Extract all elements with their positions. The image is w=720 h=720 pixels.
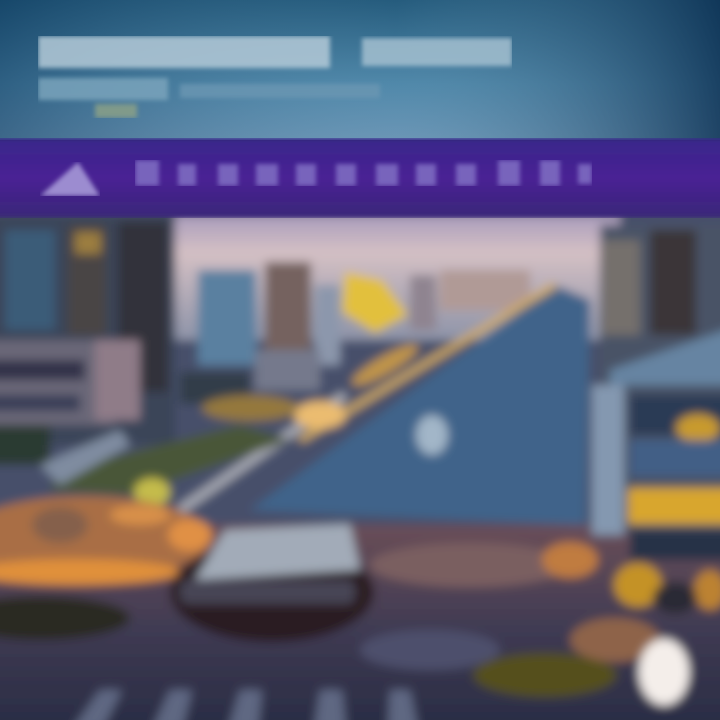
city scene xyxy=(0,200,720,720)
banner icon xyxy=(40,162,100,196)
purple banner xyxy=(0,138,720,218)
left buildings xyxy=(0,215,175,445)
heading, illegible in the reference xyxy=(38,36,512,118)
car xyxy=(170,524,374,642)
distant skyline xyxy=(180,262,530,404)
banner text, illegible in the reference xyxy=(135,160,592,186)
glowing orange lights, left xyxy=(0,496,212,640)
solar road surface xyxy=(180,285,590,525)
foreground bush and white icon xyxy=(473,618,689,705)
header panel xyxy=(0,0,720,140)
roadside greenery xyxy=(0,395,298,506)
right buildings xyxy=(592,225,720,614)
road foreground xyxy=(72,542,598,720)
